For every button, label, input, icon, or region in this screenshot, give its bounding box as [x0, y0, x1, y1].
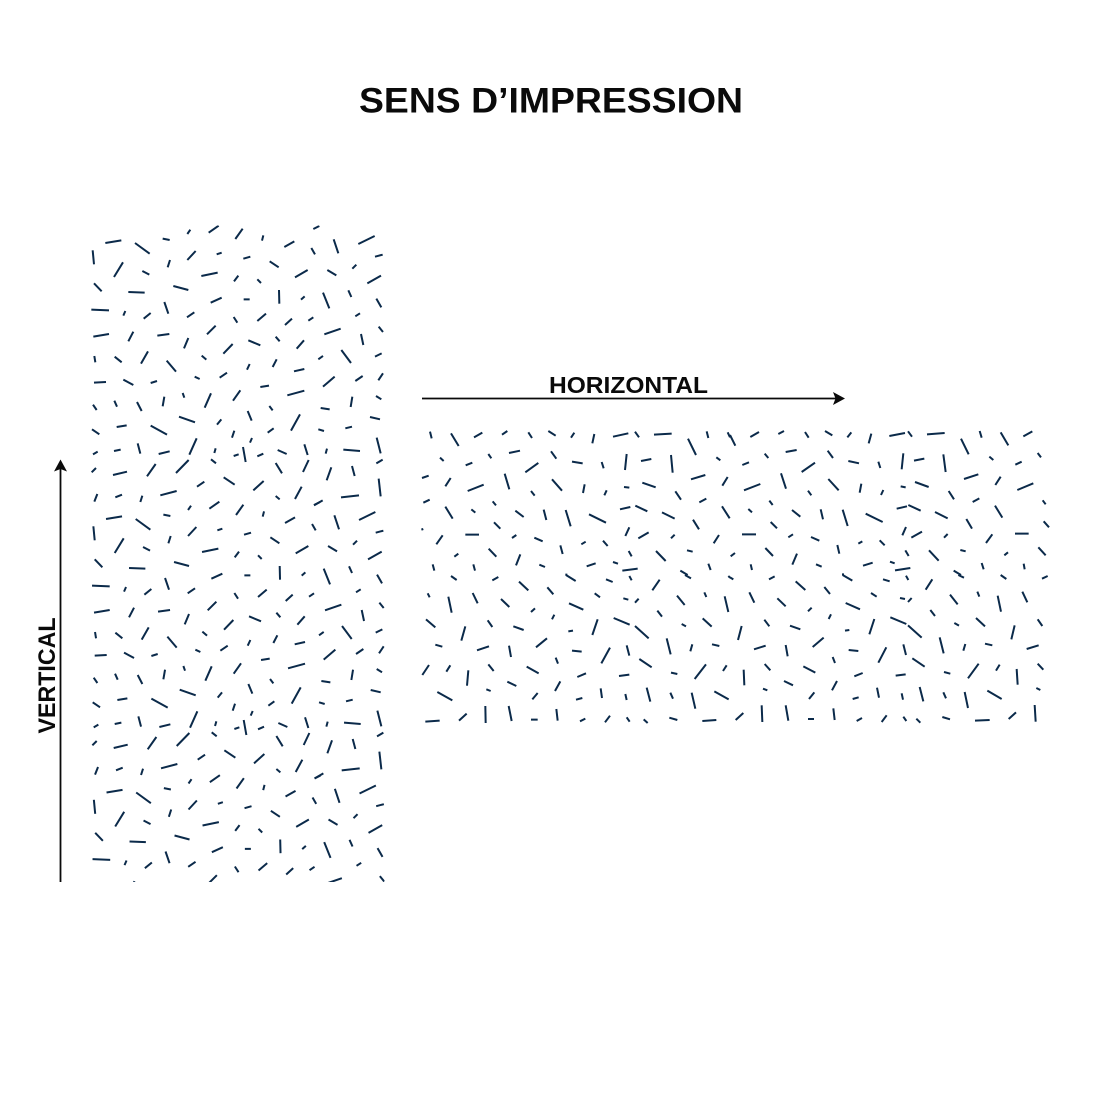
- label: vertical: VERTICAL: [34, 618, 61, 734]
- panel: horizontal printing direction pattern: [422, 431, 1049, 723]
- panel: vertical printing direction pattern: [91, 226, 384, 921]
- arrow: vertical: [54, 460, 67, 882]
- label: horizontal: HORIZONTAL: [549, 372, 708, 398]
- title: SENS D’IMPRESSION: [359, 82, 743, 120]
- arrow: horizontal: [422, 392, 845, 405]
